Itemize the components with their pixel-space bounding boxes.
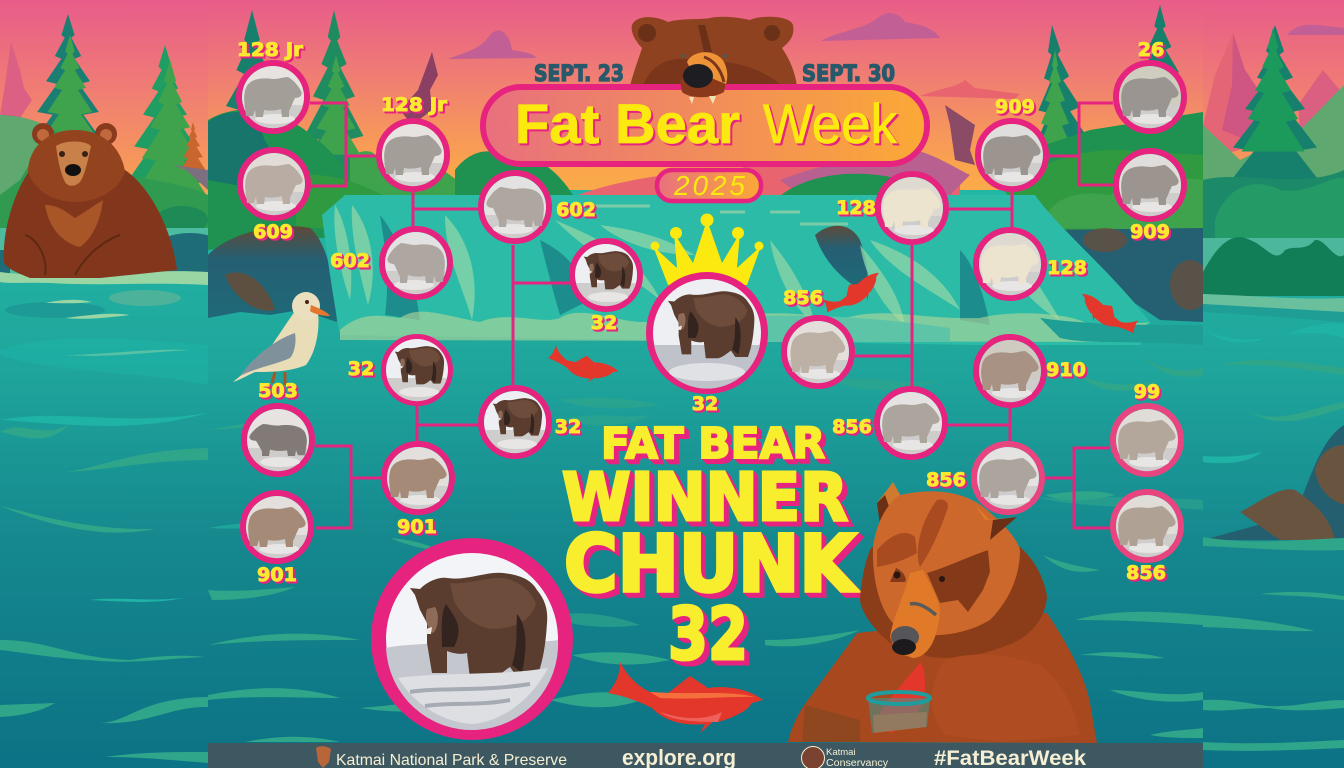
rock left — [208, 226, 337, 322]
node: 128 second round: 128 — [1047, 257, 1087, 279]
year pill: 2025 — [673, 170, 745, 201]
node: 503 — [244, 380, 312, 474]
title text thin word: Week — [763, 92, 898, 155]
node: 909 second round: 909 — [995, 96, 1035, 118]
node: 910 — [976, 337, 1086, 405]
panel: left background scene — [0, 0, 230, 768]
illustration: large bear with salmon cup — [788, 482, 1097, 743]
waterfall — [322, 195, 1150, 345]
water ribbons — [208, 318, 1203, 742]
illustration: seagull — [233, 292, 330, 385]
sky — [208, 0, 1203, 200]
node: 128 Jr first round: 128 Jr — [237, 39, 304, 61]
bracket connectors — [310, 103, 1113, 528]
node: 26 — [1116, 39, 1184, 131]
node: 901 first round — [243, 493, 311, 586]
icon: conservancy logo — [802, 746, 824, 768]
date start: SEPT. 23 — [534, 62, 624, 87]
node: 909 first round — [1116, 151, 1184, 243]
node: 32 third round — [481, 388, 581, 456]
illustration: bear peeking over title — [630, 17, 797, 86]
hills behind title — [578, 167, 960, 195]
panel: central scene — [206, 0, 1210, 768]
node: 26: 26 — [1138, 39, 1164, 61]
node: 901 second round — [384, 444, 452, 538]
cup — [868, 692, 930, 733]
date end: SEPT. 30 — [802, 62, 895, 87]
node: 99 — [1113, 381, 1181, 474]
node: 609: 609 — [253, 221, 293, 243]
node: champion 32: 32 — [692, 393, 718, 415]
footer bar — [208, 743, 1203, 768]
icon: salmon right — [1073, 282, 1142, 346]
left forest — [226, 10, 266, 110]
node: 856 first round: 856 — [1126, 562, 1166, 584]
node: 856 second round — [926, 444, 1042, 512]
node: 128 second round — [976, 230, 1087, 298]
node: 856 third round — [832, 389, 945, 457]
salmon in cup — [873, 662, 927, 733]
node: 602 third round — [481, 173, 596, 241]
line: winner: WINNER — [562, 459, 848, 536]
clouds — [448, 13, 1020, 99]
node: 901 first round: 901 — [257, 564, 297, 586]
node: 602 second round: 602 — [330, 250, 370, 272]
rock right — [1065, 228, 1203, 322]
node: 128 Jr second round: 128 Jr — [381, 94, 448, 116]
node: 128 third round — [836, 174, 946, 242]
node: 32 second round: 32 — [348, 358, 374, 380]
node: 503: 503 — [258, 380, 298, 402]
node: 32 semifinal — [572, 241, 640, 334]
node: 602 third round: 602 — [556, 199, 596, 221]
node: 609 — [240, 150, 308, 243]
node: 910: 910 — [1046, 359, 1086, 381]
line: chunk: CHUNK — [564, 520, 858, 610]
node: 128 third round: 128 — [836, 197, 876, 219]
node: 99: 99 — [1134, 381, 1160, 403]
node: 602 second round — [330, 229, 450, 297]
node: 909 second round — [978, 96, 1046, 189]
node: 856 third round: 856 — [832, 416, 872, 438]
node: 856 semifinal: 856 — [783, 287, 823, 309]
icon: park service badge — [316, 746, 331, 768]
illustration: seated brown bear left — [4, 123, 177, 278]
node: 128 Jr second round — [379, 94, 448, 189]
water base — [208, 190, 1203, 768]
node: 32 second round — [348, 337, 450, 403]
node: 909 first round: 909 — [1130, 221, 1170, 243]
title text: Fat Bear — [515, 92, 740, 155]
node: 856 semifinal — [783, 287, 852, 386]
node: 856 first round — [1113, 492, 1181, 584]
footer text: conservancy: Katmai — [826, 747, 856, 758]
node: 32 third round: 32 — [555, 416, 581, 438]
bear snout over banner — [680, 52, 727, 104]
icon: salmon lower centre — [608, 662, 763, 733]
right forest — [1038, 25, 1084, 143]
node: 901 second round: 901 — [397, 516, 437, 538]
node: 856 second round: 856 — [926, 469, 966, 491]
crown — [650, 214, 764, 285]
line: 32: 32 — [668, 592, 748, 676]
line: fat bear: FAT BEAR — [601, 419, 825, 469]
year pill — [657, 170, 761, 201]
dates — [534, 62, 895, 87]
panel: right background scene — [1203, 0, 1344, 768]
icon: salmon near 856 — [819, 261, 888, 325]
node: 32 semifinal: 32 — [591, 312, 617, 334]
node: champion 32 — [650, 276, 764, 415]
dead tree left — [400, 52, 438, 125]
winner photo large — [378, 546, 566, 732]
headline: winner text — [562, 419, 858, 676]
icon: salmon left of crown — [546, 344, 621, 386]
title banner — [483, 52, 927, 164]
node: 128 Jr first round — [237, 39, 307, 131]
